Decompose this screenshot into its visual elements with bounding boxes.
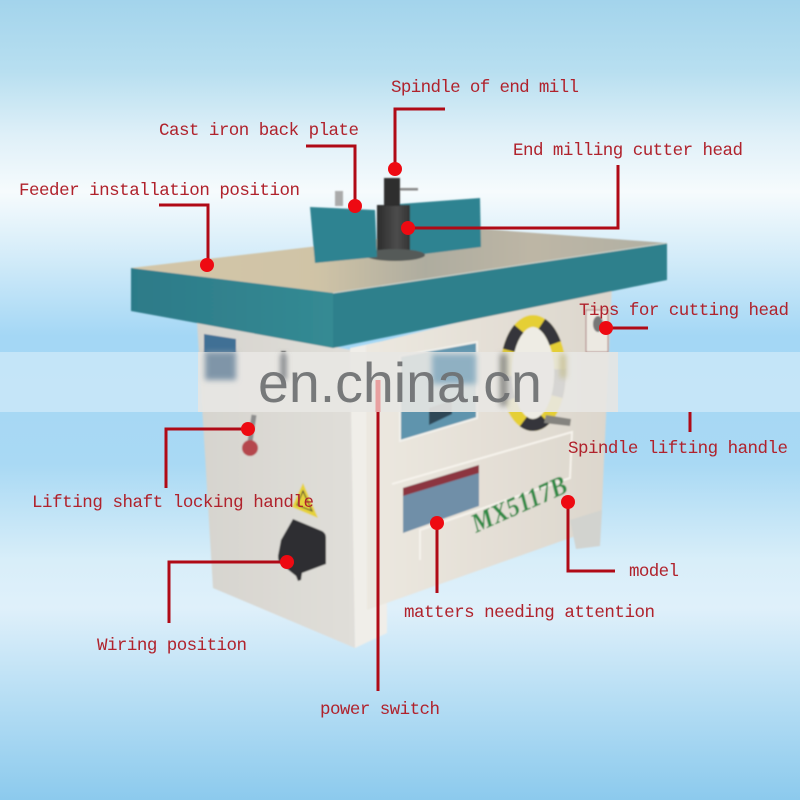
spindle — [365, 178, 425, 261]
callout: end milling cutter head: End milling cutter head — [513, 141, 743, 161]
callout: spindle of end mill: Spindle of end mill — [391, 78, 579, 98]
callout: power switch: power switch — [320, 700, 440, 720]
right fence block — [400, 198, 481, 257]
callout: feeder installation position: Feeder installation position — [19, 181, 300, 201]
callout: matters needing attention — [404, 516, 655, 623]
callout: wiring position: Wiring position — [97, 636, 247, 656]
watermark blur over machine — [198, 352, 618, 412]
tag on side — [204, 334, 236, 356]
machine body left side — [197, 322, 355, 648]
callout: tips for cutting head: Tips for cutting head — [579, 301, 789, 321]
lifting handle — [242, 415, 258, 456]
callout: wiring position — [97, 555, 294, 656]
table left edge — [131, 268, 333, 348]
machine body corner door strip — [350, 342, 387, 648]
callout: spindle of end mill — [388, 78, 579, 176]
window panel — [400, 342, 477, 441]
callout: feeder installation position — [19, 181, 300, 272]
machine body front — [366, 285, 612, 610]
attention plate — [403, 465, 479, 533]
callout: cast iron back plate: Cast iron back plate — [159, 121, 359, 141]
machine leg — [570, 510, 602, 549]
callout: cast iron back plate — [159, 121, 362, 213]
watermark band — [0, 352, 800, 412]
callout: tips for cutting head — [579, 301, 789, 335]
lever slot — [281, 351, 286, 357]
callout: lifting shaft locking handle: Lifting shaft locking handle — [32, 493, 314, 513]
lower door emboss — [392, 432, 572, 560]
callout: end milling cutter head — [401, 141, 743, 235]
pin — [335, 191, 343, 206]
callout: lifting shaft locking handle — [32, 422, 314, 513]
tips plate — [586, 310, 608, 352]
back plate block — [310, 207, 377, 263]
callout: model — [561, 495, 679, 582]
machine — [131, 178, 667, 648]
table top surface — [131, 228, 667, 293]
table front edge — [333, 243, 667, 348]
callout: model: model — [629, 562, 679, 582]
wiring box — [278, 519, 326, 581]
model lettering: MX5117B — [465, 470, 572, 539]
callout: spindle lifting handle: Spindle lifting handle — [568, 439, 788, 459]
blurred machine details in band — [205, 352, 566, 406]
watermark text: en.china.cn — [258, 352, 542, 414]
warning triangle — [292, 483, 318, 518]
callout: matters needing attention: matters needing attention — [404, 603, 655, 623]
handwheel — [506, 321, 571, 426]
